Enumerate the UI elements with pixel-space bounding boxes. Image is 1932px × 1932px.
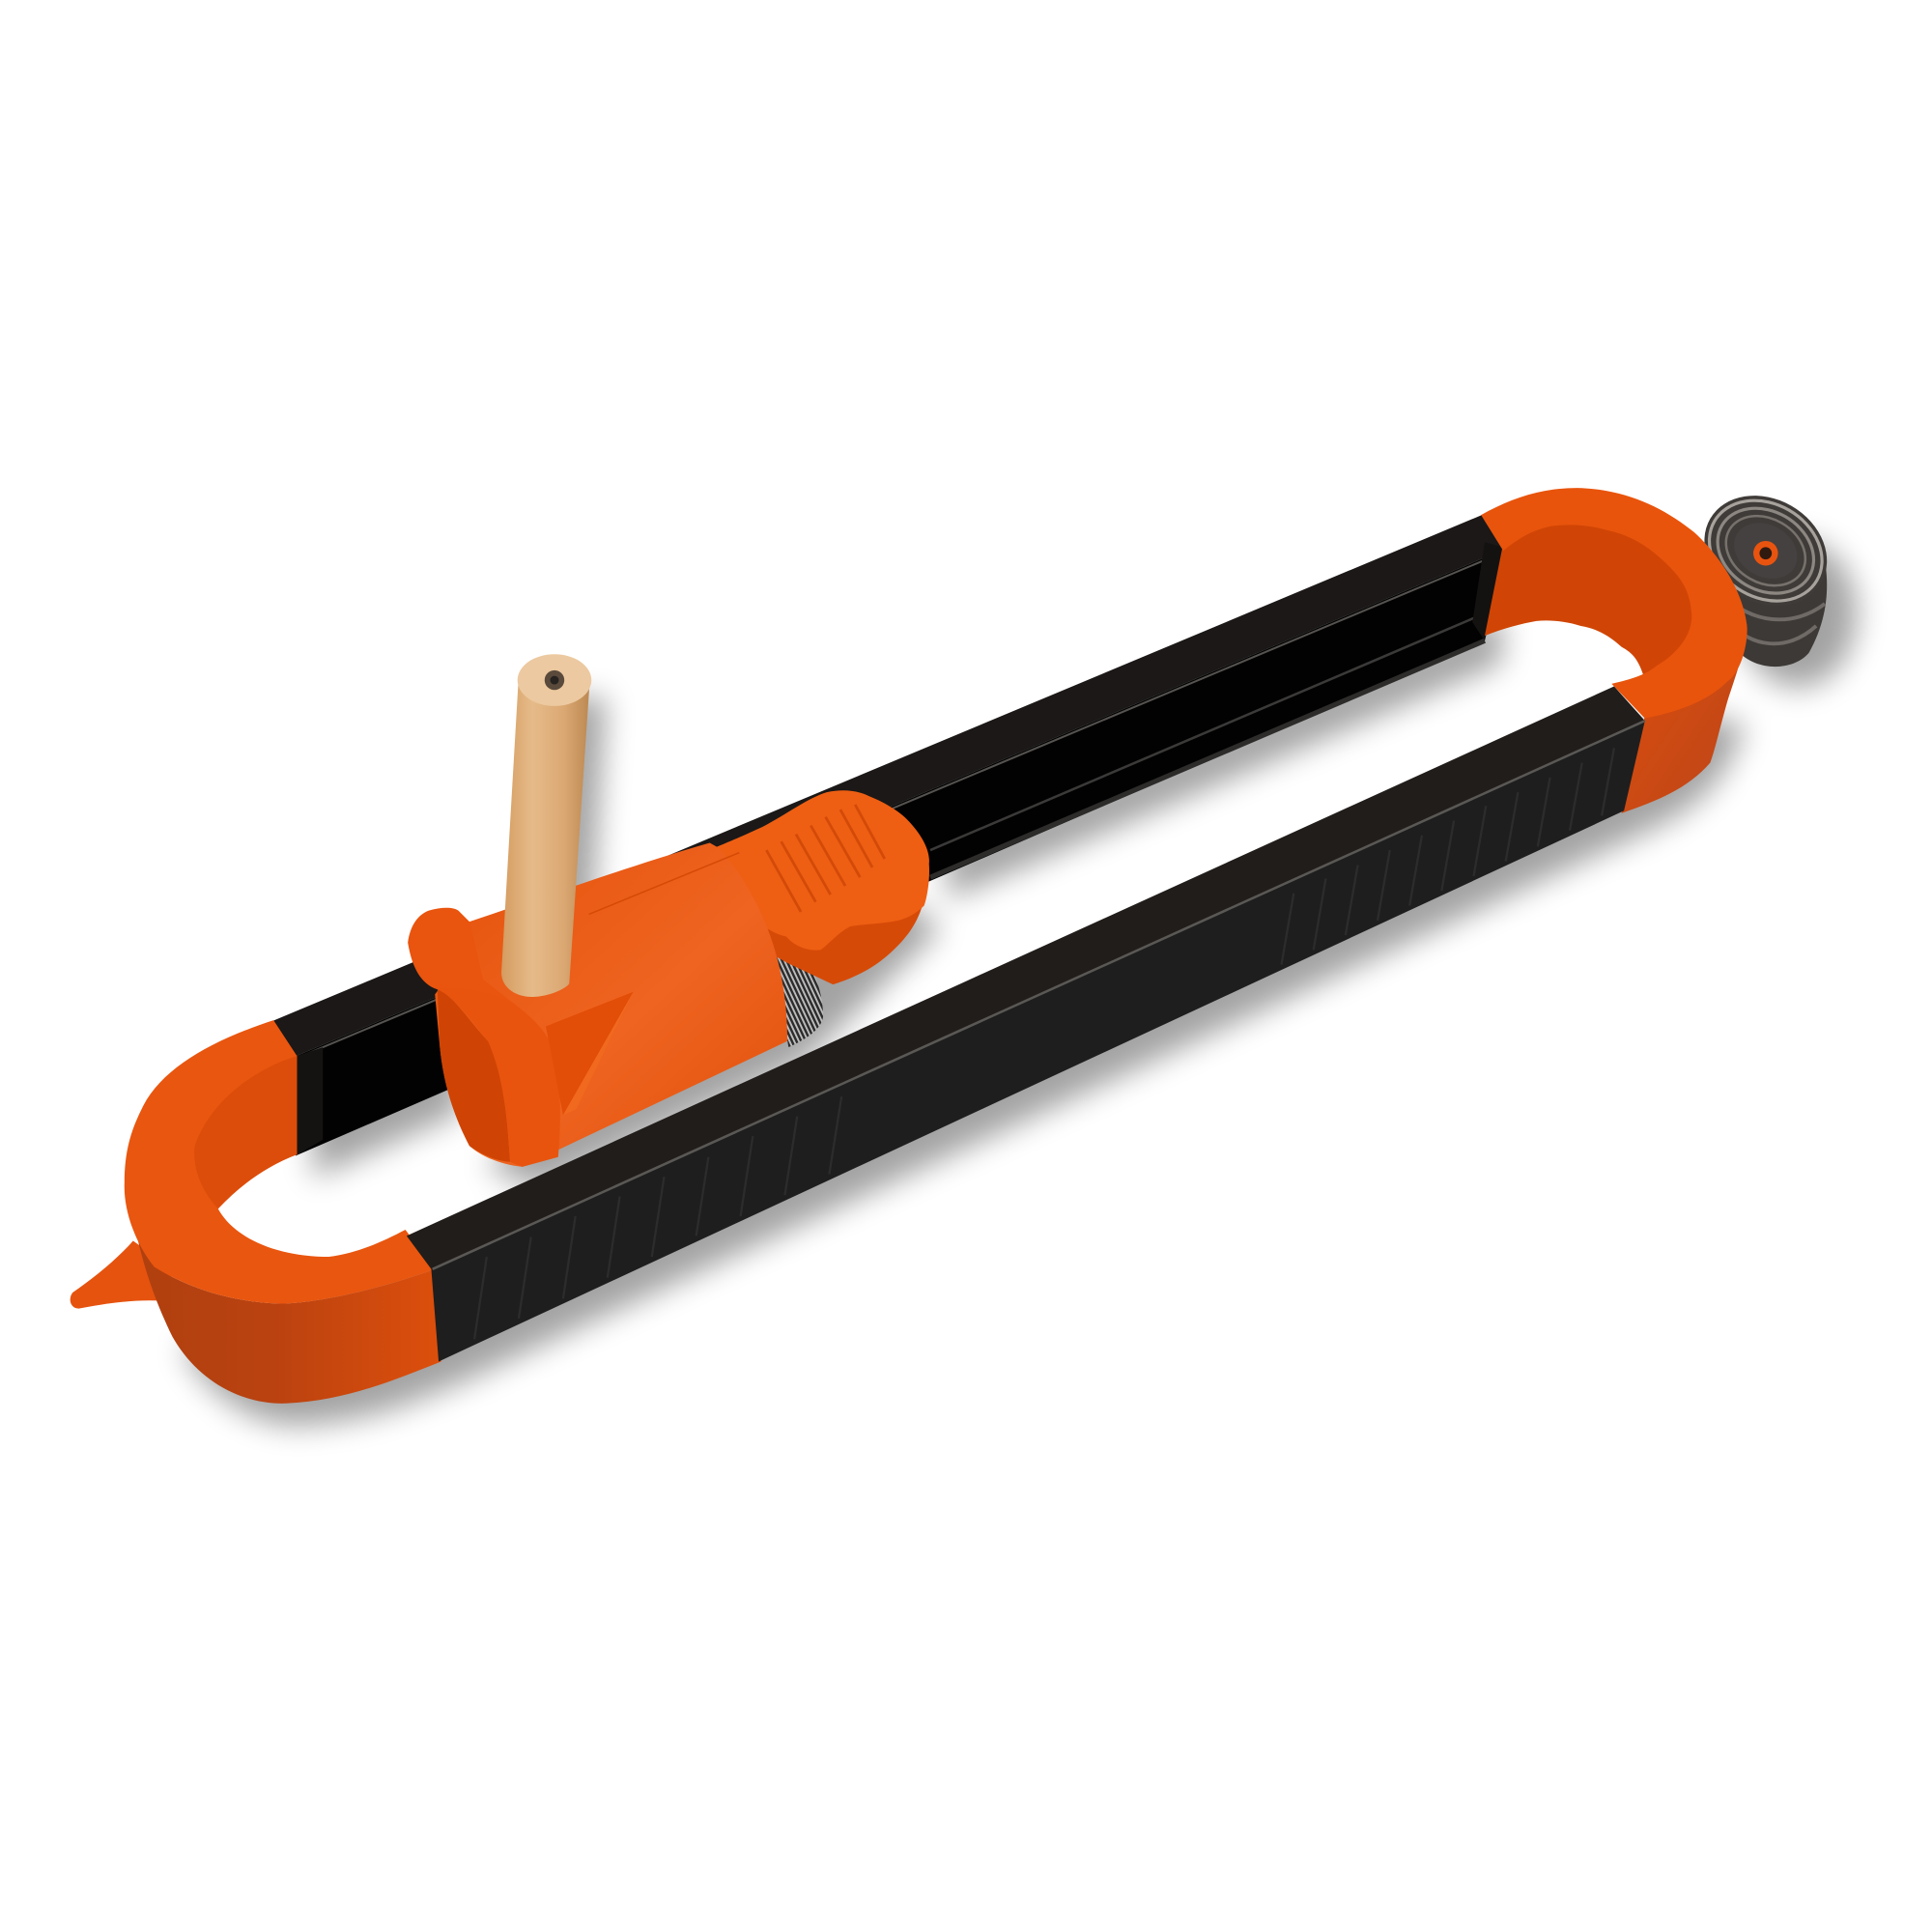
bar side face — [431, 721, 1645, 1361]
top bar with channel — [269, 514, 1507, 1155]
roller wheel — [1685, 474, 1847, 667]
wheel face — [1685, 474, 1847, 628]
front clamp piece — [438, 988, 560, 1167]
bar top face — [407, 686, 1645, 1269]
knurled screw — [770, 943, 823, 1047]
sliding carriage — [408, 790, 929, 1167]
inner wall — [1485, 511, 1707, 680]
sharp marking spike — [71, 1240, 173, 1309]
triangular notch — [546, 992, 634, 1115]
right orange end cap — [1481, 488, 1747, 813]
bottom bar — [407, 686, 1645, 1361]
bar grip ribs — [474, 748, 1614, 1339]
wooden pencil — [501, 654, 591, 997]
pencil lead hole — [545, 670, 564, 690]
funnel opening — [438, 989, 510, 1162]
thumb pad — [708, 790, 929, 951]
thumb pad underside — [739, 899, 924, 984]
left orange end cap — [71, 1020, 441, 1404]
wheel orange hub — [1753, 541, 1778, 565]
drop shadow — [183, 540, 1857, 1426]
front clamp lip — [408, 908, 516, 1006]
carriage body — [435, 842, 787, 1167]
